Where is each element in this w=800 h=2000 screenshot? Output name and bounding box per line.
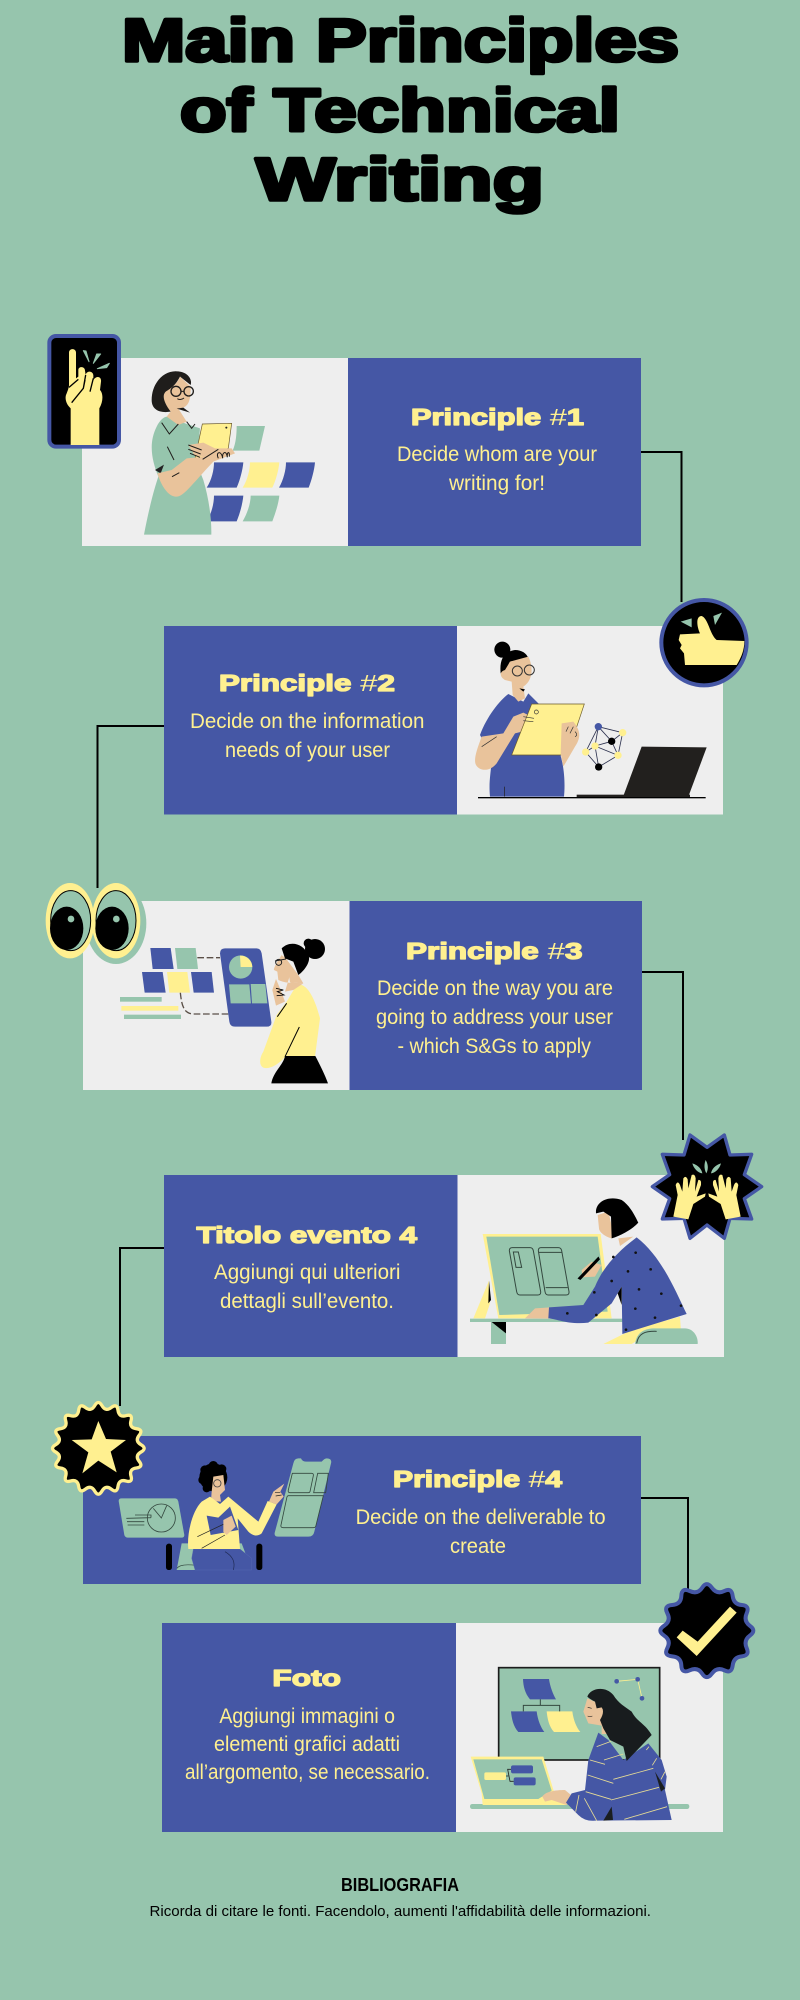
text: principle 1 description <box>397 443 597 495</box>
text: event details <box>214 1261 400 1313</box>
title: Writing <box>256 146 544 213</box>
illustration: woman at laptop in front of chart board <box>470 1668 689 1821</box>
text: principle 4 description: Decide on the deliverable to <box>356 1506 606 1529</box>
text: principle 3 description <box>376 977 613 1058</box>
illustration: woman with tablet and notes <box>144 371 315 535</box>
title: Main Principles <box>122 7 679 74</box>
panel: foto <box>162 1623 723 1832</box>
title <box>122 7 679 213</box>
panel: principle 2 <box>164 626 723 814</box>
connector: event 4 to principle 4 <box>120 1248 164 1406</box>
text: principle 1 description: Decide whom are your <box>397 443 597 466</box>
connector: principle 1 to 2 <box>641 452 682 602</box>
icon: star badge <box>52 1402 144 1494</box>
text: principle 1 description: writing for! <box>448 472 545 495</box>
text: principle 2 description <box>190 710 424 762</box>
illustration: woman drawing on a board <box>470 1198 698 1344</box>
connector: principle 4 to foto <box>641 1498 688 1590</box>
text: principle 3 description: - which S&Gs to apply <box>398 1035 591 1058</box>
text: bibliography note: Ricorda di citare le fonti. Facendolo, aumenti l'affidabilità delle informazioni. <box>150 1903 651 1920</box>
heading: bibliografia: BIBLIOGRAFIA <box>341 1875 459 1895</box>
panel: principle 1 <box>82 358 641 546</box>
heading: foto: Foto <box>272 1665 341 1691</box>
heading: principle 3: Principle #3 <box>406 938 582 964</box>
text: principle 3 description: going to address your user <box>376 1006 613 1029</box>
connector: principle 2 to 3 <box>98 726 164 888</box>
icon: eyes <box>46 883 146 964</box>
text: principle 2 description: Decide on the information <box>190 710 424 733</box>
heading: principle 4: Principle #4 <box>393 1466 562 1492</box>
text: principle 3 description: Decide on the way you are <box>377 977 613 1000</box>
icon: pointing finger <box>49 336 119 447</box>
text: principle 2 description: needs of your user <box>225 739 390 762</box>
illustration: woman with tablet, network and laptop <box>475 642 707 798</box>
panel: principle 4 <box>83 1436 641 1584</box>
icon: raised hands <box>652 1135 762 1238</box>
panel: principle 3 <box>83 901 642 1090</box>
icon: thumbs up <box>661 600 747 685</box>
title: of Technical <box>180 77 620 144</box>
text: principle 4 description <box>356 1506 606 1558</box>
illustration: woman looking at phone dashboard <box>120 939 328 1083</box>
connector: principle 3 to event 4 <box>642 972 683 1140</box>
panel: titolo evento 4 <box>164 1175 724 1357</box>
heading: titolo evento 4: Titolo evento 4 <box>196 1222 417 1248</box>
text: foto description: elementi grafici adatti <box>214 1733 400 1756</box>
text: principle 4 description: create <box>450 1535 506 1558</box>
heading: principle 2: Principle #2 <box>219 670 395 696</box>
icon: check badge <box>660 1584 753 1677</box>
text: event details: dettagli sull’evento. <box>220 1290 394 1313</box>
text: event details: Aggiungi qui ulteriori <box>214 1261 400 1284</box>
text: foto description: all’argomento, se necessario. <box>185 1761 430 1784</box>
illustration: person pointing at screens <box>119 1458 331 1570</box>
heading: principle 1: Principle #1 <box>411 404 584 430</box>
text: foto description <box>185 1705 430 1784</box>
text: foto description: Aggiungi immagini o <box>219 1705 395 1728</box>
